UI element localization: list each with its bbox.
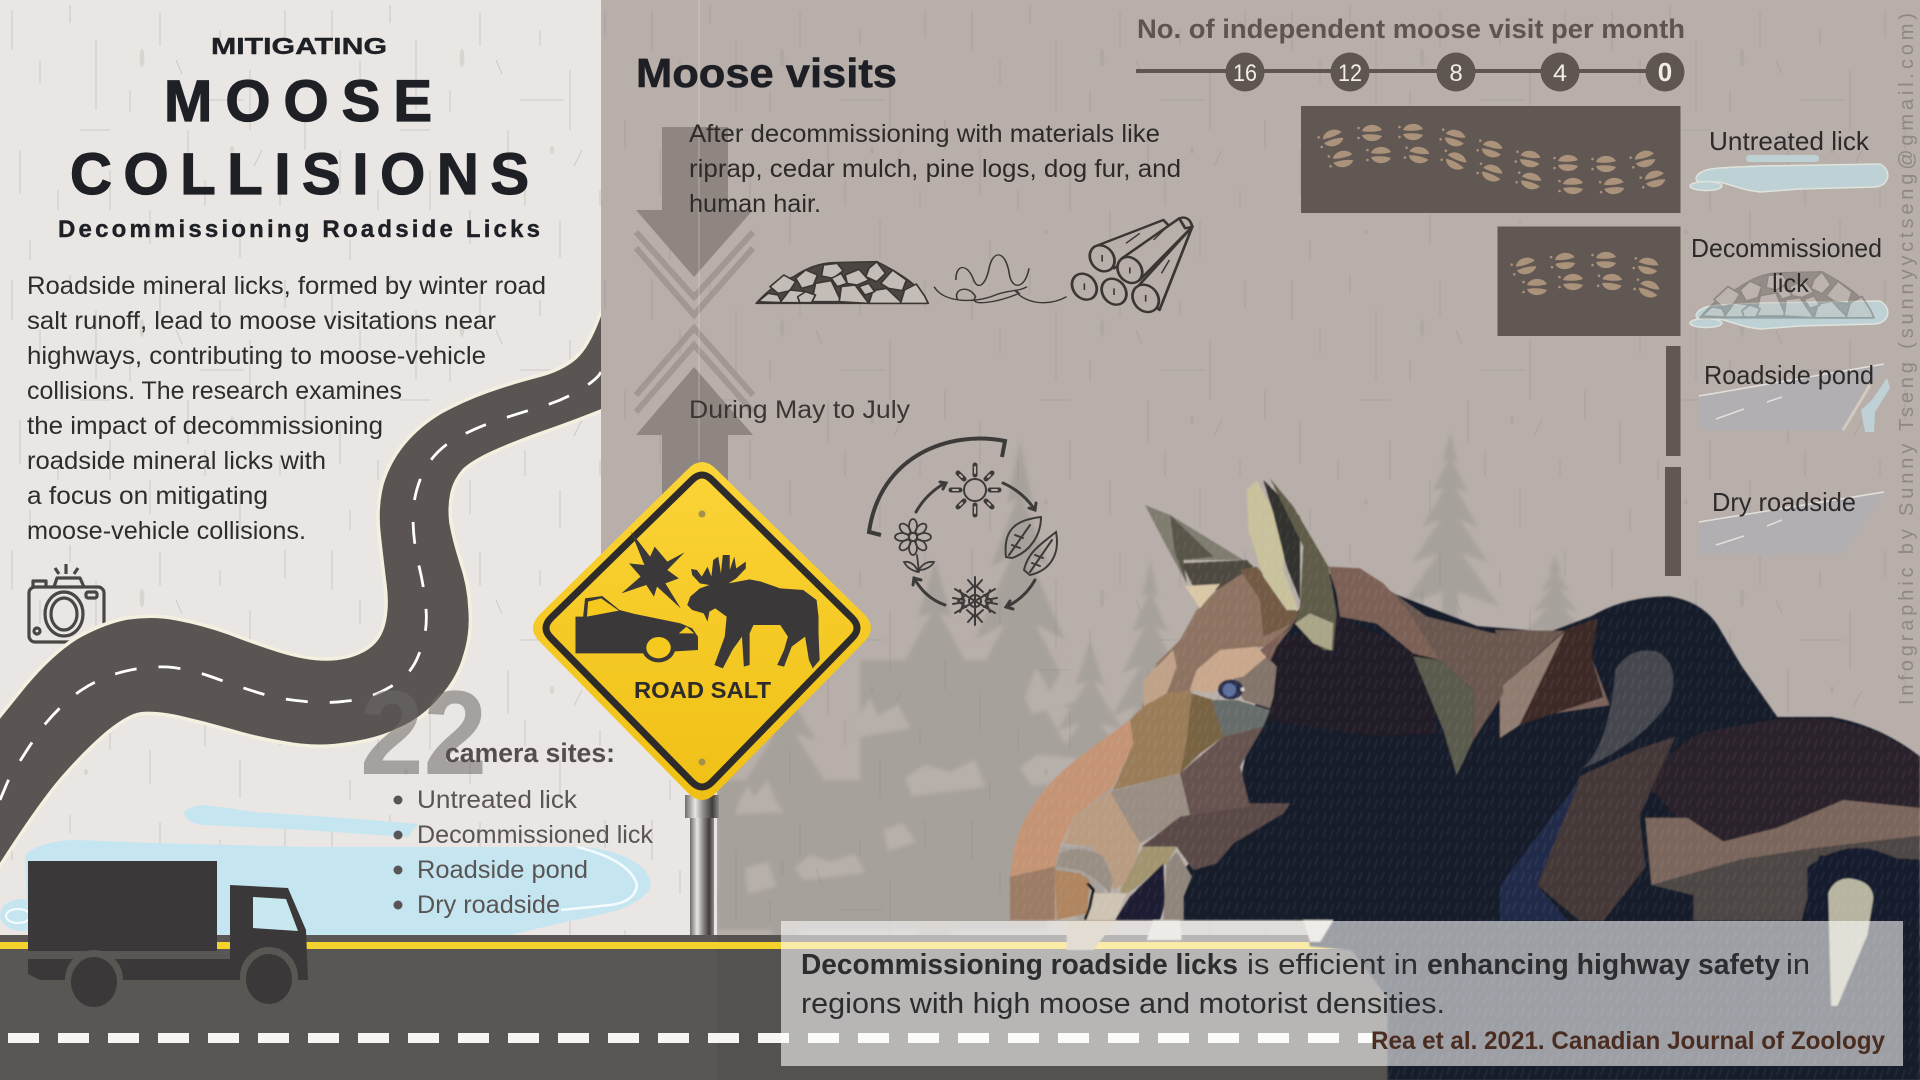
intro paragraph: roadside mineral licks with — [27, 447, 326, 475]
text: during May to July: During May to July — [689, 396, 911, 424]
intro paragraph: a focus on mitigating — [27, 482, 268, 510]
chart axis: 0 — [1658, 57, 1672, 87]
title block: MOOSE — [164, 69, 432, 134]
chart axis: 4 — [1553, 60, 1567, 87]
intro paragraph: Roadside mineral licks, formed by winter road — [27, 272, 546, 300]
conclusion text — [801, 949, 1810, 1020]
moose illustration — [1000, 470, 1920, 1080]
winding road — [0, 290, 612, 880]
text: decommissioning materials: riprap, cedar mulch, pine logs, dog fur, and — [689, 155, 1181, 183]
intro paragraph — [27, 272, 546, 545]
icon: flower — [895, 519, 934, 572]
chart axis: 16 — [1233, 60, 1257, 87]
background forest silhouettes — [700, 432, 1595, 950]
bar: roadside pond — [1666, 346, 1680, 456]
illustration: untreated lick puddle — [1690, 155, 1888, 192]
chart axis: 8 — [1449, 60, 1463, 87]
truck — [28, 861, 308, 1010]
lick labels: Untreated lick — [1709, 126, 1870, 156]
conclusion text: is efficient in — [1247, 949, 1418, 981]
heading: moose visits: Moose visits — [636, 50, 897, 96]
cycle arrows — [913, 482, 1036, 609]
text: decommissioning materials — [689, 120, 1181, 218]
credit text, vertical: Infographic by Sunny Tseng (sunnyyctseng@gmail.com) — [1896, 13, 1918, 705]
chart axis: 12 — [1338, 60, 1362, 87]
icon: hair strand — [934, 255, 1067, 303]
intro paragraph: moose-vehicle collisions. — [27, 517, 306, 545]
camera sites list: Dry roadside — [417, 891, 560, 919]
icon: autumn leaves — [1006, 517, 1057, 575]
icon: riprap rocks — [756, 262, 928, 303]
chart axis — [1136, 52, 1684, 92]
intro paragraph: collisions. The research examines — [27, 377, 402, 405]
camera sites list: Untreated lick — [417, 786, 578, 814]
icon: sun — [951, 465, 999, 515]
bar: dry roadside — [1665, 467, 1681, 576]
icon: camera — [29, 564, 104, 642]
camera sites list — [394, 786, 653, 919]
icon: down chevrons — [636, 232, 753, 315]
lick labels: Decommissioned — [1691, 233, 1882, 263]
camera sites list: Roadside pond — [417, 856, 588, 884]
conclusion text: enhancing highway safety — [1427, 949, 1780, 981]
lick labels: lick — [1772, 268, 1810, 298]
icon: up arrow — [636, 367, 753, 520]
moose body — [1304, 596, 1920, 1080]
icon: pine logs — [1068, 218, 1192, 315]
illustration: dry roadside road — [1699, 492, 1884, 555]
sign pictogram — [575, 532, 820, 668]
panel: left light panel — [0, 0, 717, 935]
sign pole — [685, 795, 719, 935]
icon: down arrow — [636, 127, 753, 277]
water puddles — [0, 805, 651, 935]
text: decommissioning materials: human hair. — [689, 190, 821, 218]
intro paragraph: salt runoff, lead to moose visitations near — [27, 307, 496, 335]
lick labels — [1691, 126, 1882, 517]
text: decommissioning materials: After decommissioning with materials like — [689, 120, 1160, 148]
camera sites heading: camera sites: — [445, 738, 615, 768]
lick labels: Dry roadside — [1712, 487, 1856, 517]
camera sites list: Decommissioned lick — [417, 821, 653, 849]
icon: up chevrons — [636, 328, 753, 412]
intro paragraph: the impact of decommissioning — [27, 412, 383, 440]
title block: Decommissioning Roadside Licks — [58, 216, 540, 243]
bar: untreated lick — [1301, 106, 1680, 213]
title block: MITIGATING — [211, 33, 387, 59]
moose head and neck — [1010, 478, 1503, 950]
title block: COLLISIONS — [70, 142, 529, 207]
sign label: ROAD SALT — [634, 677, 771, 703]
conclusion text: Decommissioning roadside licks — [801, 949, 1238, 981]
big number 22: 22 — [360, 666, 487, 800]
illustration: decommissioned lick puddle with rocks — [1690, 272, 1888, 329]
citation: Rea et al. 2021. Canadian Journal of Zoology — [1371, 1027, 1885, 1055]
seasonal cycle icon — [869, 439, 1057, 625]
main highway — [0, 935, 1920, 1080]
road salt warning sign — [533, 462, 871, 800]
conclusion text: regions with high moose and motorist densities. — [801, 988, 1445, 1020]
icon: snowflake — [953, 577, 997, 625]
chart title: No. of independent moose visit per month — [1137, 14, 1685, 44]
intro paragraph: highways, contributing to moose-vehicle — [27, 342, 486, 370]
conclusion text: in — [1786, 949, 1810, 981]
illustration: roadside pond road — [1699, 364, 1890, 432]
conclusion panel — [781, 921, 1903, 1066]
bar: decommissioned lick — [1498, 226, 1680, 336]
lick labels: Roadside pond — [1704, 360, 1874, 390]
title block — [58, 33, 540, 243]
